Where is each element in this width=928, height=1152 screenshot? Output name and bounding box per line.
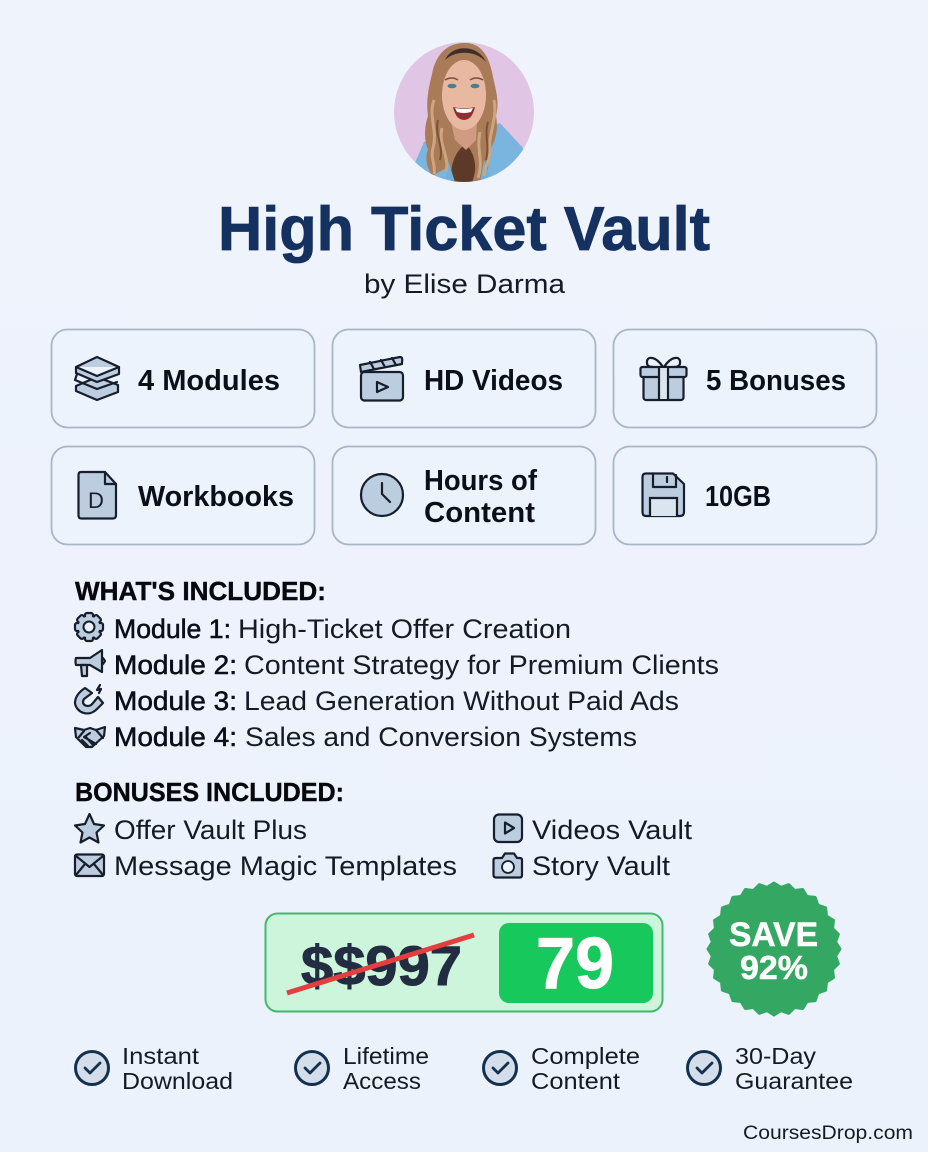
icon: handshake (75, 727, 105, 747)
module 1 row: High-Ticket Offer Creation (238, 614, 571, 644)
icon: envelope (75, 854, 104, 876)
icon: star (75, 814, 104, 842)
heading: bonuses included: BONUSES INCLUDED: (75, 777, 344, 807)
save badge: SAVE (729, 916, 818, 954)
card: Hours of Content: Content (424, 497, 535, 529)
module 1 row: Module 1: (114, 614, 231, 644)
module 3 row: Lead Generation Without Paid Ads (244, 686, 679, 716)
bonus: story vault: Story Vault (532, 851, 671, 881)
subtitle: by Elise Darma (364, 269, 566, 299)
feature: 30-day guarantee: Guarantee (735, 1068, 853, 1094)
feature: complete content (484, 1043, 640, 1094)
old price: $$997 (301, 934, 462, 997)
feature: lifetime access (296, 1043, 429, 1094)
module 4 row: Sales and Conversion Systems (245, 722, 637, 752)
bonus: videos vault: Videos Vault (532, 815, 693, 845)
card: 5 Bonuses (614, 330, 876, 428)
icon: check (484, 1052, 516, 1084)
card: 4 Modules: 4 Modules (138, 365, 280, 397)
feature: lifetime access: Access (343, 1068, 421, 1094)
feature: 30-day guarantee (688, 1043, 853, 1094)
icon: check (296, 1052, 328, 1084)
card: HD Videos: HD Videos (424, 365, 563, 397)
new price tag: 79 (536, 924, 614, 1004)
card: Workbooks (52, 446, 314, 544)
title: High Ticket Vault (218, 195, 710, 264)
icon: check (688, 1052, 720, 1084)
icon: clock (361, 474, 403, 516)
icon: document: D (88, 488, 104, 513)
icon: clapperboard (360, 357, 403, 400)
icon: floppy disk (642, 474, 684, 516)
module 3 row (75, 685, 679, 716)
feature: instant download: Download (122, 1068, 233, 1094)
feature: instant download (76, 1043, 233, 1094)
icon: play square (494, 814, 522, 842)
card: 4 Modules (52, 330, 314, 428)
bonus: offer vault plus: Offer Vault Plus (114, 815, 307, 845)
save badge (708, 883, 840, 1015)
card: 10GB (614, 446, 876, 544)
module 2 row: Content Strategy for Premium Clients (244, 650, 719, 680)
icon: camera (494, 854, 522, 878)
card: Hours of Content (332, 446, 596, 544)
heading: what's included: WHAT'S INCLUDED: (75, 576, 326, 606)
watermark: CoursesDrop.com (743, 1123, 913, 1144)
feature: complete content: Complete (531, 1043, 640, 1069)
icon: gear (75, 613, 103, 641)
feature: lifetime access: Lifetime (343, 1043, 429, 1069)
feature: 30-day guarantee: 30-Day (735, 1043, 817, 1069)
card: HD Videos (332, 330, 596, 428)
save badge: 92% (740, 949, 808, 986)
new price tag (499, 923, 653, 1004)
module 2 row (76, 650, 719, 680)
module 3 row: Module 3: (114, 686, 237, 716)
card: 5 Bonuses: 5 Bonuses (706, 365, 846, 397)
module 4 row: Module 4: (114, 722, 237, 752)
bonus: message magic templates: Message Magic Templates (114, 851, 457, 881)
card: 10GB: 10GB (705, 481, 771, 513)
icon: megaphone (76, 650, 105, 676)
avatar portrait (394, 42, 534, 190)
icon: magnet (75, 685, 103, 713)
card: Workbooks: Workbooks (138, 481, 294, 513)
icon: books (75, 357, 119, 400)
card: Hours of Content: Hours of (424, 465, 537, 497)
icon: document (78, 472, 116, 518)
module 2 row: Module 2: (114, 650, 237, 680)
module 4 row (75, 722, 637, 752)
icon: gift (640, 358, 686, 400)
feature: instant download: Instant (122, 1043, 200, 1069)
price box (266, 914, 662, 1012)
feature: complete content: Content (531, 1068, 621, 1094)
module 1 row (75, 613, 571, 644)
icon: check (76, 1052, 108, 1084)
strikethrough (287, 935, 474, 993)
